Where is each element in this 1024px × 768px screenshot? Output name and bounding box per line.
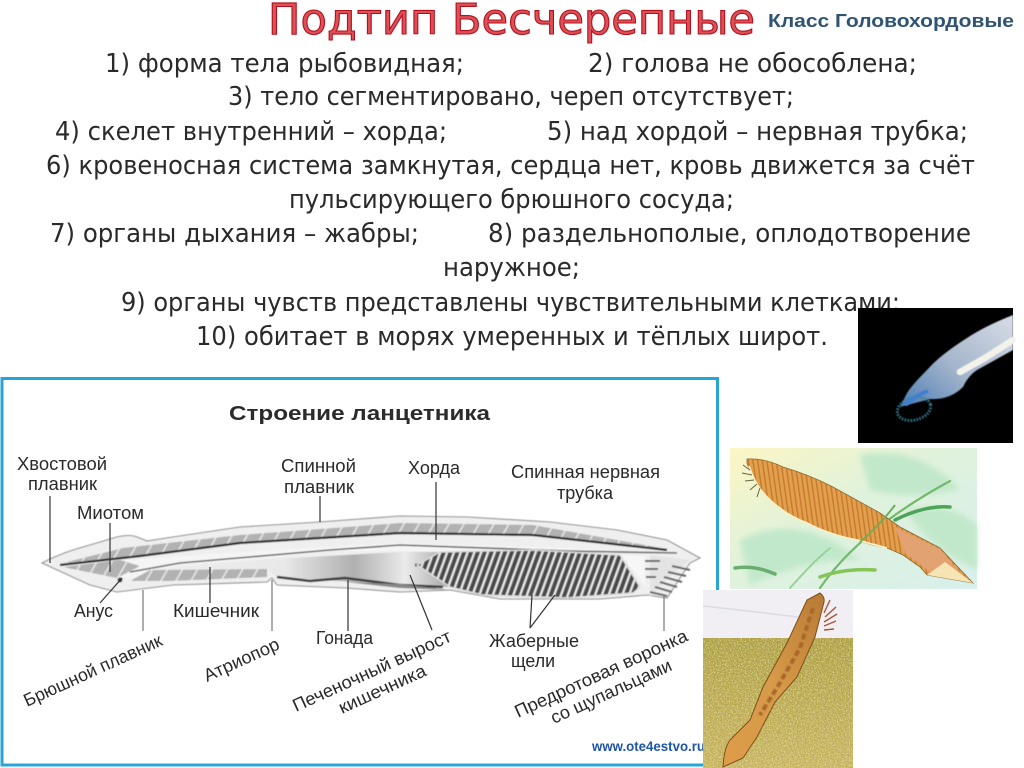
lancelet anatomical drawing — [42, 516, 700, 599]
diagram labels: со щупальцами — [547, 655, 675, 728]
text block: characteristics list: 2) голова не обособлена; — [588, 49, 917, 79]
text block: characteristics list: 7) органы дыхания – жабры; — [50, 219, 419, 249]
diagram labels: Анус — [74, 601, 113, 621]
text block: characteristics list: пульсирующего брюшного сосуда; — [289, 185, 734, 215]
diagram labels: Хорда — [408, 458, 461, 478]
diagram labels: Жаберные — [489, 631, 579, 651]
diagram labels: Спинная нервная — [511, 462, 660, 482]
diagram labels: плавник — [284, 477, 354, 497]
diagram labels — [17, 454, 692, 728]
text block: characteristics list: 3) тело сегментировано, череп отсутствует; — [228, 82, 794, 112]
diagram labels: Предротовая воронка — [511, 625, 692, 722]
diagram labels: трубка — [557, 483, 614, 503]
diagram labels: Печеночный вырост — [289, 626, 454, 716]
diagram labels: Гонада — [316, 628, 374, 648]
source URL: www.ote4estvo.ru — [591, 739, 705, 754]
diagram labels: Атриопор — [200, 634, 282, 686]
text block: characteristics list: 10) обитает в морях умеренных и тёплых широт. — [196, 322, 828, 352]
photo: lancelet on black background — [858, 308, 1013, 443]
diagram labels: плавник — [28, 474, 97, 494]
illustration: lancelet among seaweed — [730, 448, 977, 589]
leader lines — [50, 482, 664, 631]
diagram labels: Хвостовой — [17, 454, 107, 474]
diagram labels: щели — [511, 651, 555, 671]
text block: characteristics list: 5) над хордой – нервная трубка; — [547, 117, 968, 147]
text block: characteristics list — [46, 49, 975, 352]
diagram labels: Брюшной плавник — [20, 630, 165, 711]
text block: characteristics list: 9) органы чувств представлены чувствительными клетками; — [121, 288, 900, 318]
diagram labels: Спинной — [281, 456, 356, 476]
diagram labels: Миотом — [77, 503, 144, 523]
illustration: lancelet burrowed in sand — [703, 590, 853, 768]
diagram heading: Строение ланцетника — [229, 402, 491, 425]
lancelet body, side view — [747, 459, 973, 583]
text block: characteristics list: наружное; — [443, 253, 580, 283]
text block: characteristics list: 6) кровеносная система замкнутая, сердца нет, кровь движется за счёт — [46, 151, 975, 181]
text block: characteristics list: 1) форма тела рыбовидная; — [105, 49, 464, 79]
subtitle: class: Класс Головохордовые — [768, 10, 1014, 31]
diagram labels: кишечника — [335, 660, 430, 718]
text block: characteristics list: 8) раздельнополые, оплодотворение — [488, 219, 971, 249]
text block: characteristics list: 4) скелет внутренний – хорда; — [55, 117, 447, 147]
panel: lancelet structure diagram — [2, 378, 718, 765]
diagram labels: Кишечник — [173, 601, 259, 621]
